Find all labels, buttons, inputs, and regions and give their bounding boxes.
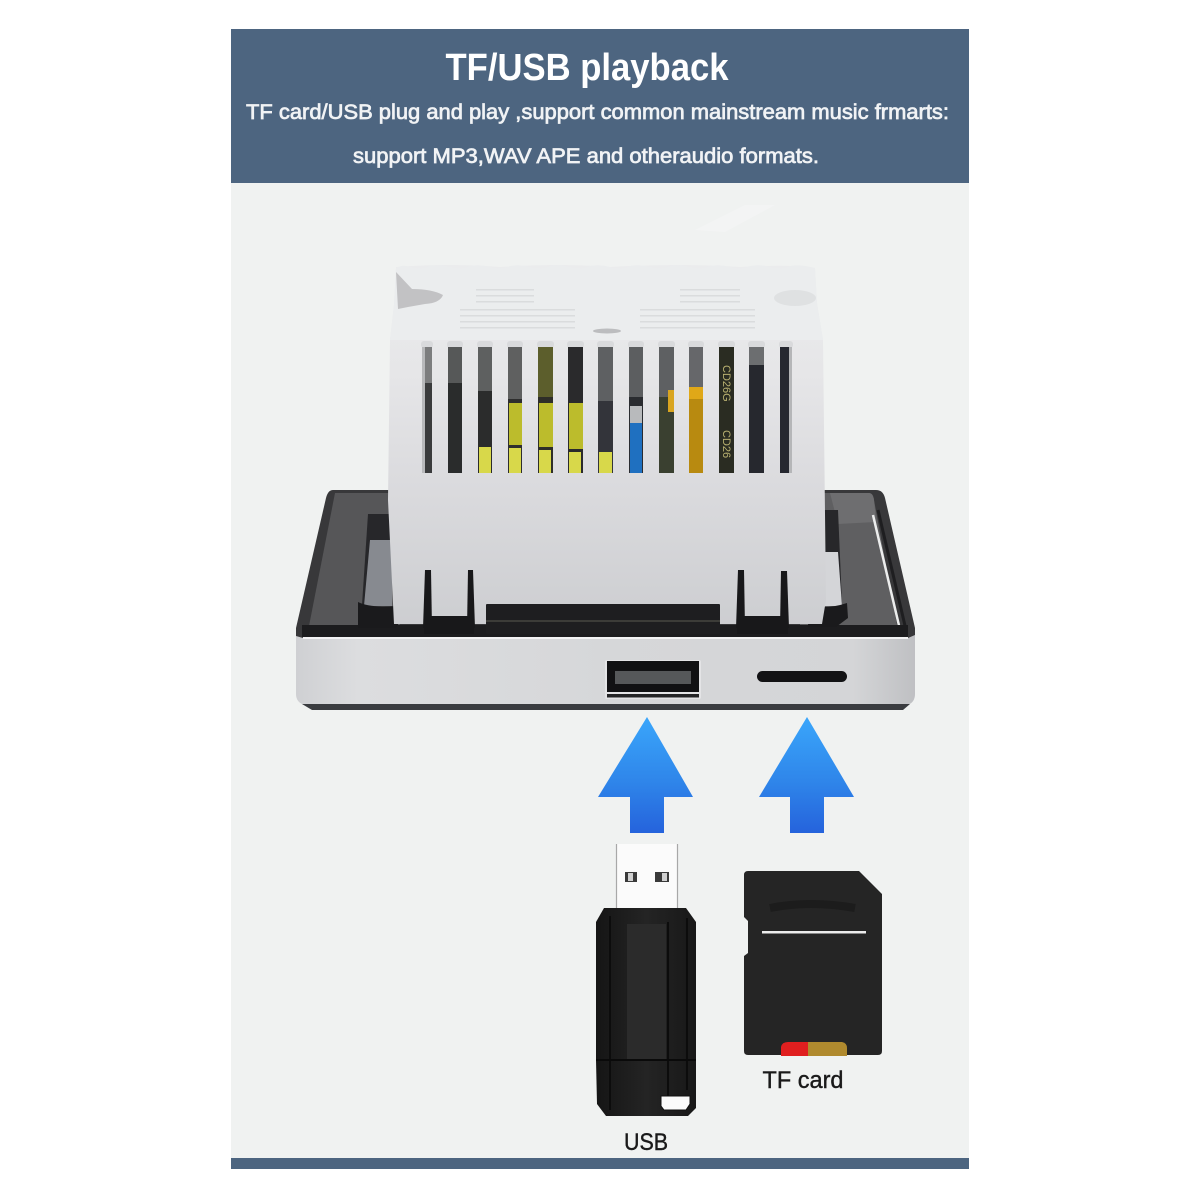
plate lower black lip (302, 625, 908, 637)
USB port (605, 660, 701, 699)
screw recess right (774, 290, 816, 306)
right recess (824, 510, 842, 604)
vent ribs (460, 289, 755, 328)
plate right highlight (873, 515, 901, 634)
mounting plate outer bezel (296, 490, 915, 640)
centre hole (593, 328, 621, 334)
subtitle line 1: TF card/USB plug and play ,support common mainstream music frmarts: (246, 101, 949, 124)
label: TF card: TF card (762, 1067, 844, 1094)
slot rim shading (421, 341, 793, 348)
icon: TF card (744, 871, 882, 1056)
base notches (423, 570, 789, 634)
plate front edge (296, 635, 915, 705)
product photo: wall amplifier: CD26 (720, 430, 732, 458)
arrow: TF card (759, 717, 854, 833)
screw recess left (396, 272, 443, 309)
vent slots with circuit board (422, 347, 792, 473)
enclosure body (388, 265, 826, 624)
panel: background (231, 29, 969, 1169)
plate inner right (800, 493, 897, 627)
footer band (231, 1158, 969, 1169)
black connector bar (486, 604, 720, 634)
product photo: wall amplifier (296, 265, 915, 710)
plate inner left (309, 493, 400, 626)
left recess (362, 514, 392, 605)
icon: USB flash drive (596, 844, 696, 1116)
subtitle line 2: support MP3,WAV APE and otheraudio formats. (353, 145, 819, 168)
enclosure top face (390, 265, 823, 340)
label: USB: USB (624, 1129, 668, 1156)
slot markings: CD26G (720, 365, 732, 402)
title: TF/USB playback (446, 47, 729, 89)
TF card slot (757, 671, 847, 682)
arrow: USB (598, 717, 693, 833)
header band (231, 29, 969, 183)
